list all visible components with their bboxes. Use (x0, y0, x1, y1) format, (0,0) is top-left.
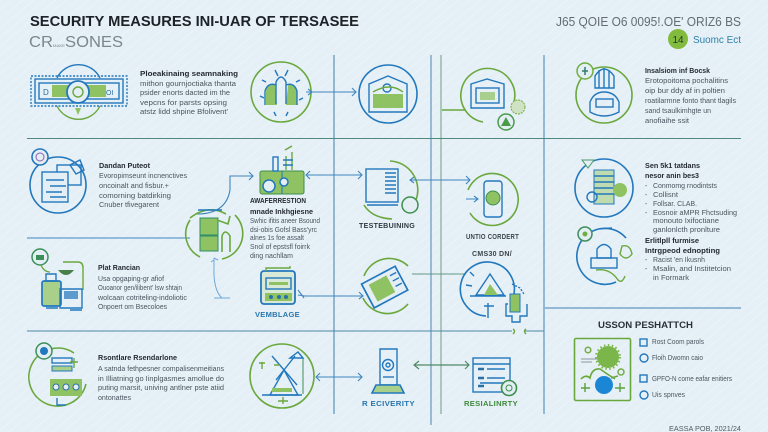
label: VEMBLAGE (255, 310, 300, 319)
text block: random restore: Rsontlare Rsendarlone (98, 353, 177, 362)
icon: report document (473, 358, 516, 396)
labels: TESTEBUINING (359, 221, 415, 230)
text block: plan random: Usa opgaping-gr afiof (98, 276, 164, 283)
text block: right 2: nesor anin bes3 (645, 171, 699, 180)
text block: right 3: Msalin, and Institetcion (653, 266, 731, 273)
text block: right 3: - (645, 266, 647, 273)
text block: plan random: Plat Rancian (98, 263, 140, 272)
arrow (414, 361, 469, 369)
icon: warning flask circle (250, 344, 314, 408)
text block: right 1 (645, 66, 737, 125)
text block: middle: AWAFERRESTION (250, 196, 306, 205)
icon: plug circle (577, 227, 632, 284)
panel list item: Floih Dwomn caio (652, 355, 703, 362)
arrow (306, 171, 362, 179)
text block: right 3 (645, 236, 731, 282)
arrow (410, 176, 470, 184)
top right heading: J65 QOIE O6 0095!.OE' ORIZ6 BS (556, 14, 741, 29)
text block: data protect: comorning batdirking (99, 193, 171, 200)
text block: random restore: A satnda fethpesner compalisenmeitians (98, 366, 225, 373)
panel list item: Uis spnves (652, 392, 686, 399)
panel: green network diagram (574, 338, 630, 400)
text block: right 3: Intrgpeod ednopting (645, 246, 720, 255)
text block: right 2: - (645, 201, 647, 208)
panel list item: Rost Coom parols (652, 339, 705, 346)
text block: data protect: Evoropimseunt incnenctives (99, 173, 188, 180)
subtitle: CR MAKESONES (29, 34, 123, 51)
icon: banknote: OI (106, 90, 113, 97)
arrow (197, 172, 253, 214)
icon: plant machine (32, 249, 83, 310)
text block: right 2 (645, 161, 737, 234)
icon: stack circle (29, 343, 86, 406)
icon: robot circle (576, 63, 632, 123)
text block: middle: dsi-obis Gofsl Bass'yrc (250, 227, 318, 234)
text block: middle: ding nachllam (250, 253, 293, 260)
text block: right 2: Follsar. CLAB. (653, 201, 697, 208)
panel: lesson heading: USSON PESHATTCH (598, 320, 693, 330)
icon: machine (260, 146, 304, 194)
icon: pen stand (211, 258, 230, 298)
label: UNTIO CORDERT (466, 232, 519, 241)
icon: banknote: D (43, 88, 49, 97)
icon: tablet circle (362, 258, 466, 314)
text block: random restore (98, 353, 225, 402)
icon: server circle (575, 159, 633, 217)
text block: random restore: puting marsit, univing antlner pste atiid (98, 385, 224, 392)
icon: banknote (31, 65, 127, 119)
text block: right 3: - (645, 257, 647, 264)
text block: middle: mnade Inkhgiesne (250, 207, 313, 216)
panel list item (640, 391, 686, 399)
text block: right 1: Insalsiom inf Bocsk (645, 66, 710, 75)
label: CMS30 DN/ (472, 249, 512, 258)
icon: figures circle (251, 62, 311, 122)
text block: random restore: in Illiatning go Iinplgasmes amollue do (98, 376, 224, 383)
text block: right 2: monouto Ixifoctiane (653, 218, 719, 225)
icon: recovery device (372, 349, 404, 393)
text block: right 2: Eosnoir aMPR Fhctsuding (653, 210, 737, 217)
text block: right 1: Erotopoitoma pochalitins (645, 78, 729, 85)
text block: data protect: Dandan Puteot (99, 161, 151, 170)
icon: device (261, 266, 295, 304)
text block: plan random (97, 263, 188, 311)
text block: right 3: Erlitlpll furmise (645, 236, 699, 245)
text block: random restore: ontonattes (98, 395, 132, 402)
text block: right 2: - (645, 183, 647, 190)
icon: green tablet circle (186, 210, 243, 259)
text block: row 1 left: vepcns for parsts opsing (140, 100, 227, 107)
text block: row 1 left (140, 69, 238, 116)
text block: right 2: Conmomg rnodintsts (653, 183, 718, 190)
text block: right 1: oip bur ddy af in poltien (645, 88, 725, 95)
text block: row 1 left: Ploeakinaing seamnaking (140, 69, 238, 78)
text block: plan random: wolcaan cotriteling-indoliotic (97, 295, 188, 302)
text block: right 2: - (645, 210, 647, 217)
badge: 14 (672, 35, 684, 46)
text block: plan random: Onpoert om Bsecoloes (98, 304, 168, 311)
arrow (298, 290, 363, 299)
panel list item: GPFO-N come eafar enitiers (652, 376, 733, 383)
text block: right 2: ganlonlcth pronlture (653, 227, 720, 234)
text block: middle: Snol of epstsfl foirrk (250, 244, 311, 251)
text block: right 3: in Formark (653, 275, 690, 282)
text block: right 1: roatilarmne fonto thant tlagils (645, 98, 737, 105)
text block: right 1: sand tsaulkimhgte un (645, 108, 711, 115)
badge: Suomc Ect (693, 34, 741, 46)
text block: middle: Swhic ifitis aneer Bsound (250, 218, 320, 225)
text block: right 2: - (645, 192, 647, 199)
title: SECURITY MEASURES INI-UAR OF TERSASEE (30, 13, 359, 30)
icon: barcode document circle (364, 161, 418, 219)
text block: right 1: anofiaihe ssit (645, 118, 689, 125)
icon: phone circle (466, 173, 518, 225)
panel list item (640, 354, 703, 362)
text block: plan random: Ouoanor gen/ilibent' lsw shtajn (98, 285, 182, 292)
icon: documents circle (30, 149, 86, 213)
icon: monitor circle (442, 68, 525, 130)
text block: row 1 left: psider enorts dacted im the (140, 90, 230, 97)
badge (668, 29, 741, 49)
text block: row 1 left: mithon gournjoctiaka thanta (140, 81, 236, 88)
icon: warning circle (460, 262, 527, 334)
text block: row 1 left: atstz lidd shpine Bfolivent' (140, 109, 228, 116)
text block: right 2: Collisnt (653, 192, 678, 199)
arrow (306, 88, 356, 96)
text block: middle (250, 196, 320, 260)
icon: blue circle (359, 65, 417, 123)
text block: right 3: Racist 'en Ikusnh (653, 257, 705, 264)
label: R ECIVERITY (362, 399, 415, 408)
arrow (316, 373, 362, 381)
text block: data protect: oncoinalt and fisbur.+ (99, 183, 169, 190)
text block: data protect: Cnuber tfivegarent (99, 202, 159, 209)
text block: middle: alnes 1s foe assalt (250, 235, 304, 242)
text block: data protect (99, 161, 188, 209)
label: RESIALINRTY (464, 399, 518, 408)
text block: right 2: Sen 5k1 tatdans (645, 161, 700, 170)
